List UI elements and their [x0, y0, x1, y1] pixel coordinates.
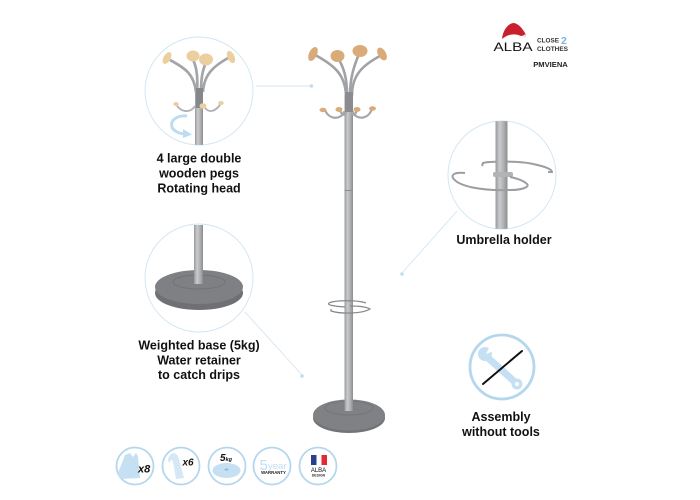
- panel: pegs detail: [145, 37, 253, 146]
- logo: Alba Close 2 Clothes: PMVIENA: [533, 60, 568, 69]
- base close-up: [155, 276, 243, 310]
- label: umbrella holder: Umbrella holder: [456, 233, 552, 247]
- icon: Alba design, French flag: [300, 448, 336, 484]
- lower hooks: [325, 109, 372, 118]
- label: assembly: without tools: [461, 425, 540, 439]
- panel: weighted base detail: [145, 224, 253, 332]
- icon: 5 year warranty: year: [268, 461, 286, 472]
- upper arms: [317, 54, 380, 95]
- icon: umbrella x6: x6: [182, 458, 194, 468]
- logo: Alba Close 2 Clothes: ALBA: [494, 42, 533, 54]
- label: weighted base: Weighted base (5kg): [138, 338, 260, 352]
- icon: 5kg base: [208, 448, 246, 484]
- icon: 5kg base: 5kg: [220, 453, 233, 464]
- pole close-up: [493, 120, 513, 230]
- stand pole: [344, 95, 353, 411]
- label: weighted base: to catch drips: [158, 368, 240, 382]
- label: weighted base: Water retainer: [157, 354, 241, 368]
- icon: coat x8: x8: [137, 464, 151, 476]
- wrench: [478, 346, 522, 390]
- icon: coat x8: [116, 448, 154, 484]
- icon: Alba design, French flag: ALBA: [311, 468, 326, 474]
- connector: weighted base: [245, 312, 304, 378]
- icon: 5 year warranty: [254, 448, 290, 484]
- icon: umbrella x6: [162, 448, 200, 484]
- stand base: [313, 400, 385, 433]
- connector: pegs: [256, 84, 313, 88]
- logo: Alba Close 2 Clothes: [494, 23, 569, 69]
- main product: coat stand: [306, 45, 389, 433]
- icon: 5 year warranty: WARRANTY: [261, 470, 286, 475]
- icon: assembly without tools: [470, 335, 534, 399]
- umbrella ring: [329, 301, 370, 313]
- label: pegs: wooden pegs: [158, 166, 239, 180]
- label: pegs: Rotating head: [157, 182, 241, 196]
- ring front close-up: [453, 173, 528, 190]
- icon: 5 year warranty: 5: [260, 457, 268, 474]
- panel: umbrella holder detail: [448, 120, 556, 230]
- logo: Alba Close 2 Clothes: 2: [561, 35, 567, 47]
- connector: umbrella holder: [400, 211, 457, 276]
- logo: Alba Close 2 Clothes: CLOSE: [537, 38, 560, 44]
- icon: Alba design, French flag: DESIGN: [312, 474, 326, 478]
- pole close-up: [194, 225, 203, 284]
- icon row: features: [116, 448, 336, 484]
- icon: rotation arrow: [172, 116, 192, 138]
- label: assembly: Assembly: [471, 410, 531, 424]
- wooden pegs: [306, 45, 389, 112]
- pegs close-up: [161, 50, 237, 146]
- logo: Alba Close 2 Clothes: CLOTHES: [537, 46, 569, 53]
- label: pegs: 4 large double: [157, 152, 241, 166]
- ring back close-up: [482, 162, 552, 172]
